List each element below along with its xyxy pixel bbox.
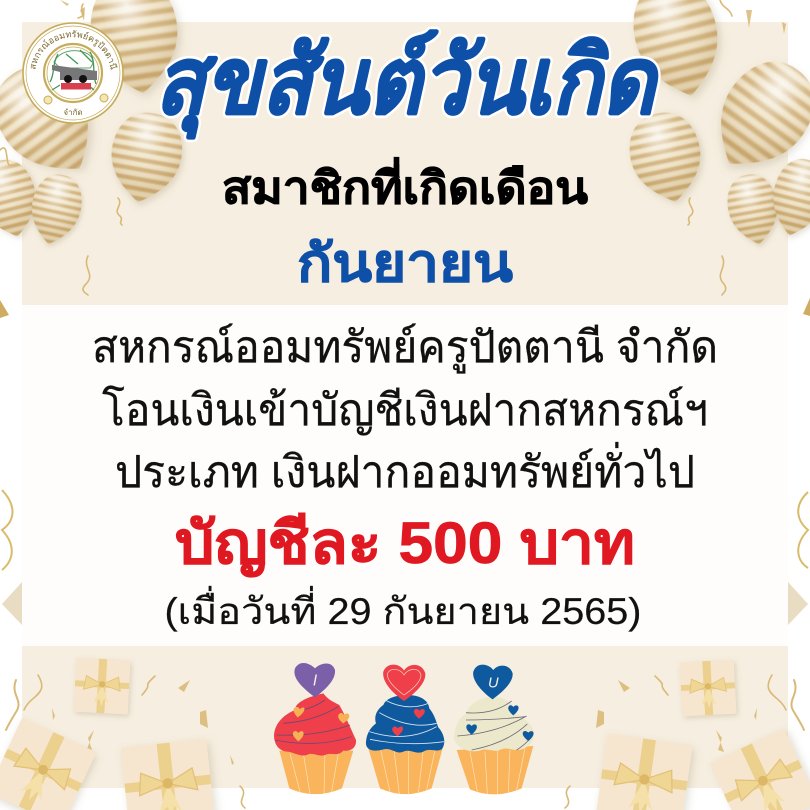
message text block <box>92 323 718 497</box>
icon: cupcakes <box>274 663 534 795</box>
title: สุขสันต์วันเกิด <box>155 29 660 139</box>
panel: white message band <box>22 305 788 646</box>
decoration: balloons right <box>613 0 810 257</box>
month heading: กันยายน <box>297 235 514 293</box>
date note: (เมื่อวันที่ 29 กันยายน 2565) <box>164 585 642 632</box>
message text block: สหกรณ์ออมทรัพย์ครูปัตตานี จำกัด <box>92 323 718 374</box>
message text block: โอนเงินเข้าบัญชีเงินฝากสหกรณ์ฯ <box>102 385 708 435</box>
logo: cooperative seal: จำกัด <box>63 108 83 117</box>
icon: cream cupcake with U heart: U <box>488 675 499 691</box>
logo: cooperative seal: สหกรณ์ออมทรัพย์ครูปัตตานี <box>30 30 118 70</box>
amount highlight: บัญชีละ 500 บาท <box>175 511 635 577</box>
decoration: gold ribbon and gift at page margins <box>0 298 810 625</box>
icon: cream cupcake with U heart <box>454 665 534 795</box>
decoration: balloons left <box>0 0 196 258</box>
message text block: ประเภท เงินฝากออมทรัพย์ทั่วไป <box>115 441 695 497</box>
icon: red cupcake with I heart: I <box>313 672 318 689</box>
subtitle: members born in month: สมาชิกที่เกิดเดือน <box>222 157 588 213</box>
icon: red cupcake with I heart <box>274 663 356 794</box>
logo: cooperative seal <box>22 22 124 124</box>
icon: blue cupcake with heart <box>366 665 444 795</box>
decoration: gift boxes right <box>595 660 810 810</box>
decoration: gift boxes left <box>0 658 215 810</box>
title: สุขสันต์วันเกิด <box>155 29 660 139</box>
